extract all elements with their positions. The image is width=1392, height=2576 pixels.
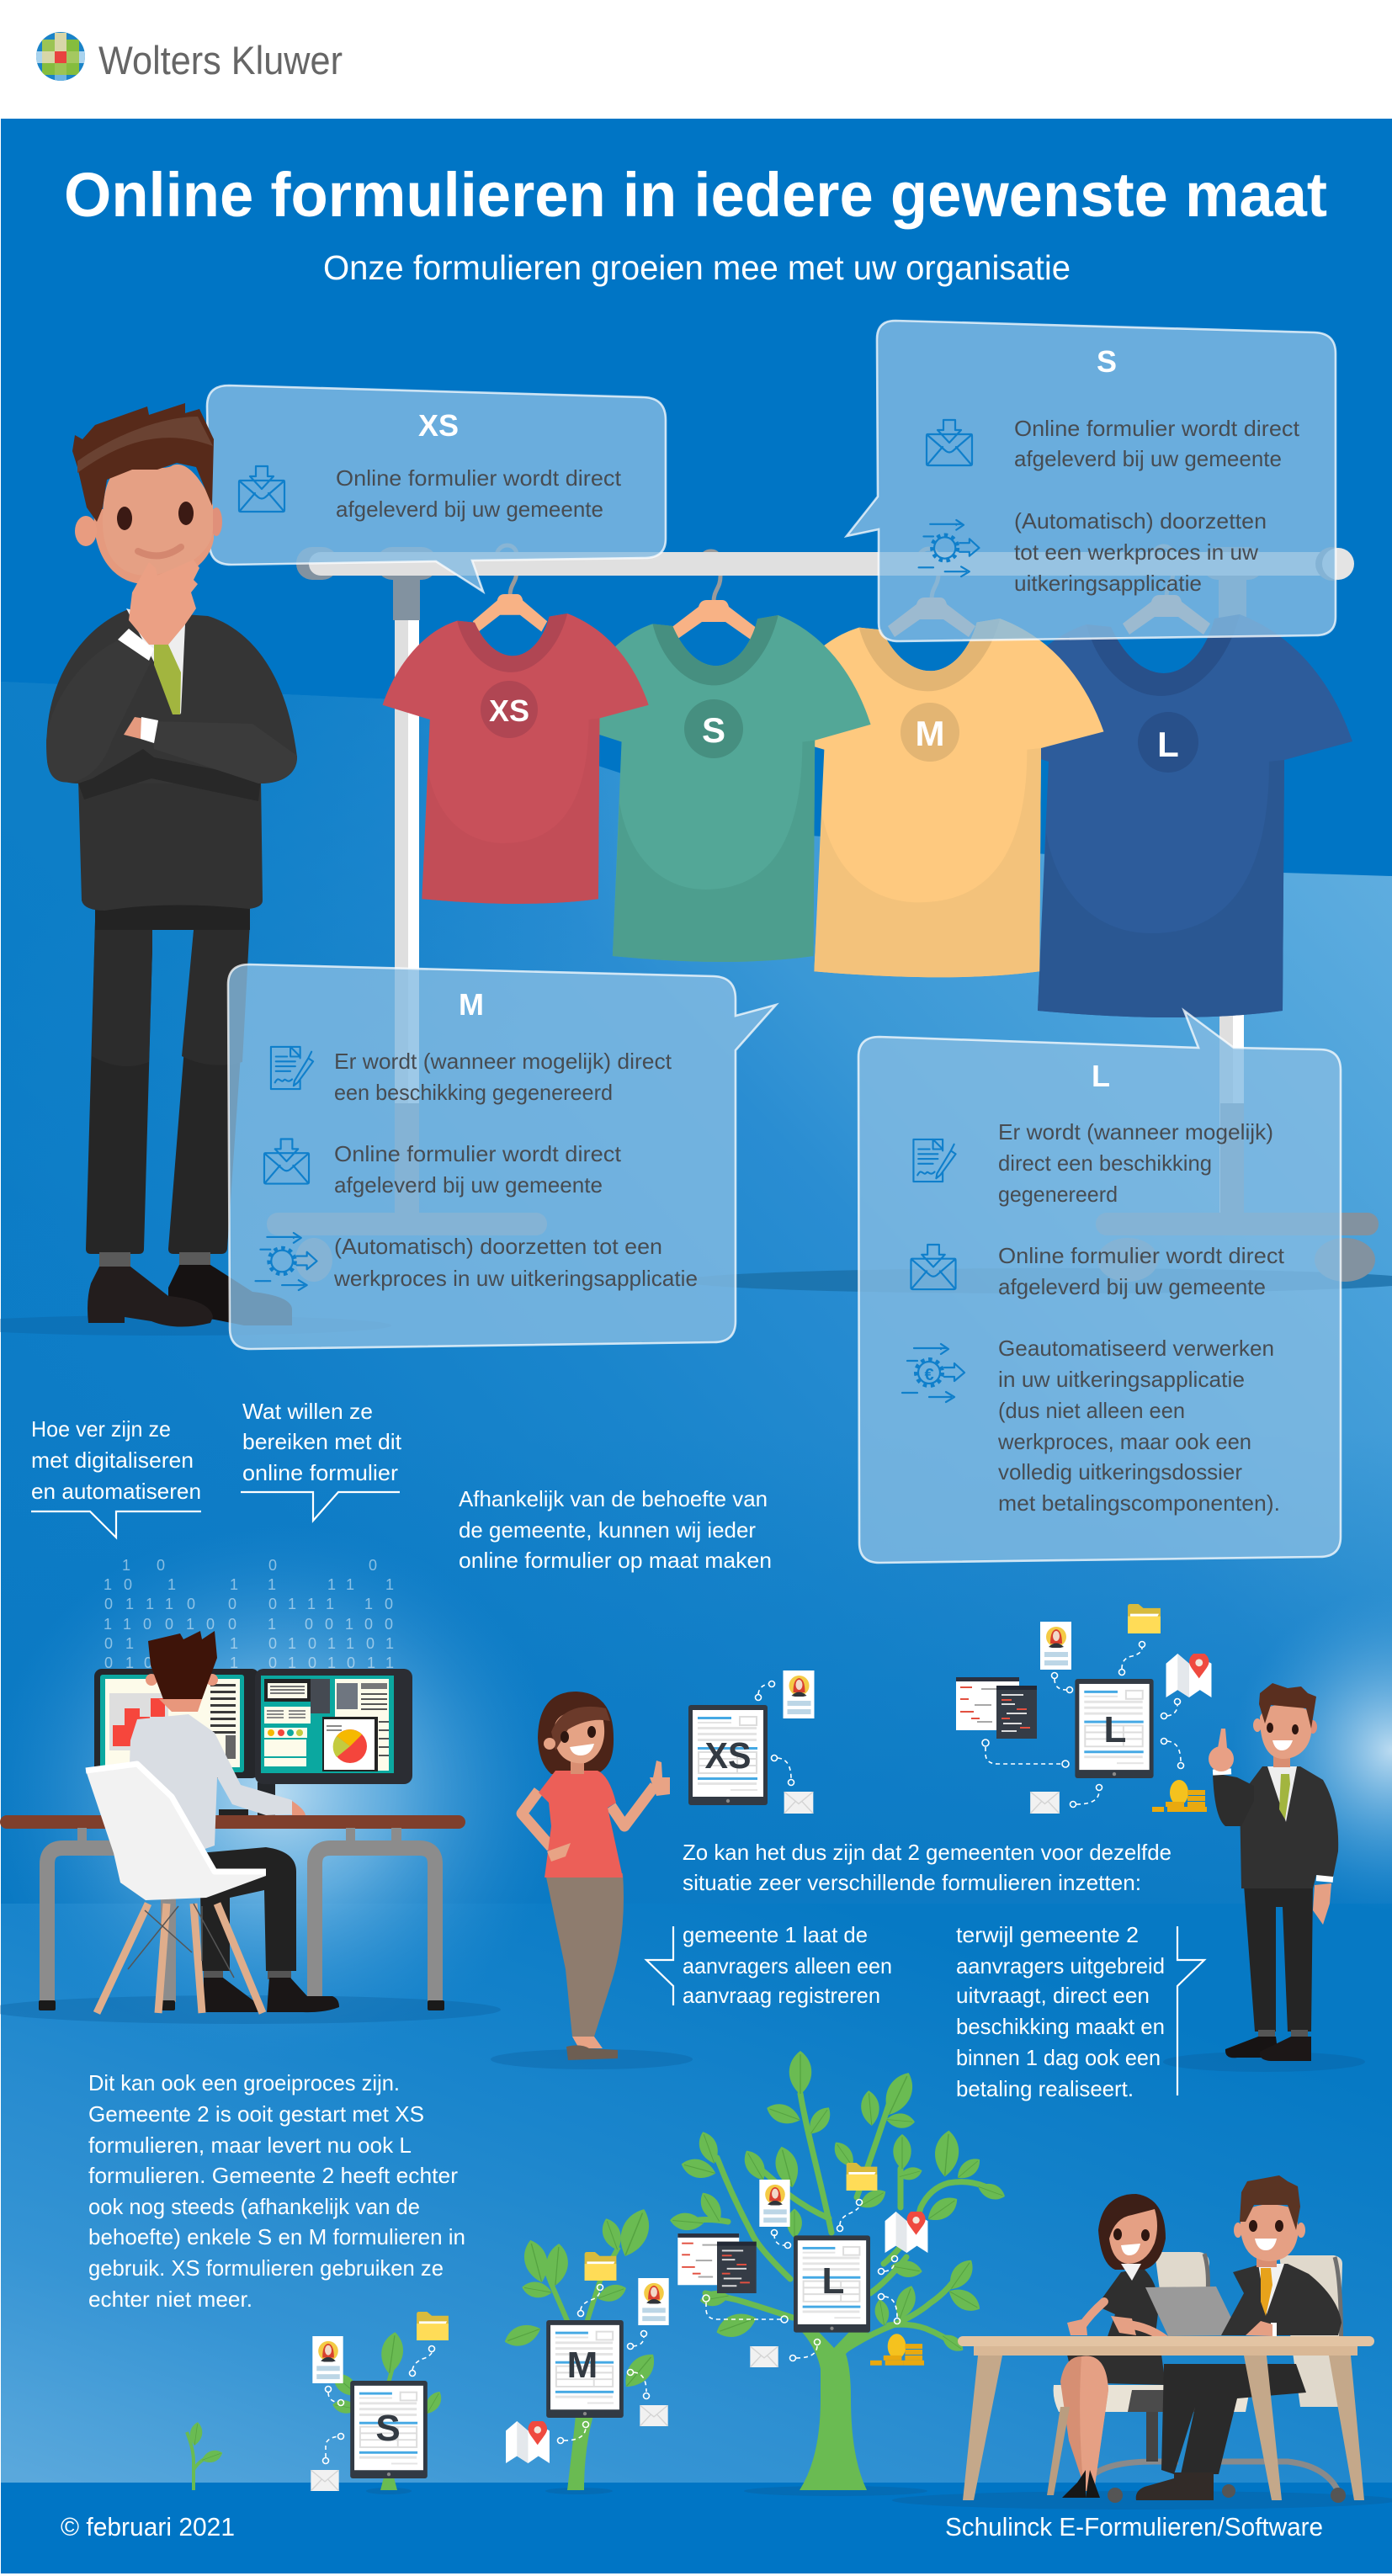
callout: digitalisation question	[31, 1416, 201, 1538]
icon: signed document	[913, 1139, 956, 1182]
text: M workflow	[333, 1234, 698, 1291]
text: two municipalities intro: Zo kan het dus zijn dat 2 gemeenten voor dezelfde	[683, 1840, 1172, 1865]
footer band	[61, 2486, 1392, 2541]
form diagram: L tablet	[956, 1604, 1211, 1814]
panel: M	[228, 964, 776, 1349]
binary digits: 1100100100100	[104, 1616, 393, 1633]
callout: municipality 2: terwijl gemeente 2	[956, 1922, 1139, 1947]
t-shirt L	[983, 595, 1352, 1017]
callout: digitalisation question: Hoe ver zijn ze	[31, 1416, 171, 1442]
text: growth process: formulieren, maar levert nu ook L	[88, 2133, 412, 2158]
binary digits: 1000	[122, 1557, 377, 1574]
text: L automation: in uw uitkeringsapplicatie	[998, 1367, 1245, 1392]
text: L automation: met betalingscomponenten).	[998, 1490, 1280, 1516]
heading XS: XS	[418, 408, 459, 443]
t-shirt L: L	[1157, 725, 1179, 764]
text: L decision: gegenereerd	[998, 1182, 1118, 1207]
title: Online formulieren in iedere gewenste maat	[64, 160, 1327, 230]
t-shirt S: S	[702, 710, 725, 750]
header: Wolters Kluwer logo: Wolters Kluwer	[98, 38, 343, 82]
heading S: S	[1097, 344, 1117, 379]
callout: goal question: bereiken met dit	[242, 1429, 402, 1454]
text: S delivery: afgeleverd bij uw gemeente	[1014, 446, 1282, 471]
clothing rack	[267, 547, 1392, 1293]
text: M delivery: afgeleverd bij uw gemeente	[334, 1172, 603, 1198]
text: L decision	[998, 1119, 1273, 1207]
small sprout	[187, 2421, 224, 2490]
callout: digitalisation question: en automatiseren	[31, 1479, 201, 1504]
icon: gear with arrows	[256, 1233, 316, 1290]
text: M decision: een beschikking gegenereerd	[334, 1080, 613, 1105]
text: L automation	[997, 1336, 1280, 1516]
footer band: © februari 2021	[61, 2512, 235, 2541]
callout: goal question	[241, 1399, 402, 1521]
text: XS delivery: afgeleverd bij uw gemeente	[336, 497, 603, 522]
text: L delivery: Online formulier wordt direct	[998, 1243, 1285, 1268]
growth stage: M tablet tree	[502, 2204, 669, 2490]
icon: envelope	[911, 1245, 956, 1289]
text: depending on need: Afhankelijk van de behoefte van	[459, 1486, 768, 1511]
text: S workflow	[1014, 508, 1267, 596]
text: growth process: Dit kan ook een groeiproces zijn.	[88, 2070, 400, 2095]
heading L: L	[1092, 1059, 1110, 1093]
text: M decision	[334, 1049, 672, 1105]
t-shirt XS	[383, 594, 649, 904]
icon: envelope	[264, 1139, 309, 1184]
panel: S	[847, 321, 1336, 641]
text: L decision: Er wordt (wanneer mogelijk)	[998, 1119, 1273, 1145]
panel: L	[858, 1011, 1341, 1563]
icon: envelope	[927, 420, 972, 465]
growth stage: L tablet tree: L	[822, 2260, 844, 2302]
binary digits: 10111111	[104, 1576, 394, 1593]
form diagram: L tablet: L	[1104, 1709, 1126, 1750]
text: L decision: direct een beschikking	[998, 1150, 1212, 1176]
callout: municipality 1: aanvragers alleen een	[683, 1953, 892, 1978]
character: thinking man, body	[0, 608, 391, 1336]
footer band: Schulinck E-Formulieren/Software	[945, 2512, 1323, 2541]
header: Wolters Kluwer logo	[36, 32, 343, 82]
text: XS delivery	[336, 465, 622, 522]
text: XS delivery: Online formulier wordt direct	[336, 465, 622, 491]
text: L automation: (dus niet alleen een	[998, 1398, 1185, 1423]
text: growth process: behoefte) enkele S en M formulieren in	[88, 2224, 465, 2249]
icon: signed document	[271, 1047, 313, 1089]
growth stage: M tablet tree: M	[567, 2345, 598, 2386]
t-shirt XS: XS	[489, 693, 529, 728]
hanger hooks	[497, 545, 1173, 602]
character: woman with thumb up	[491, 1692, 693, 2069]
binary digits: 0110101101	[104, 1635, 394, 1652]
form diagram: XS tablet	[688, 1670, 815, 1814]
growth stage: L tablet tree	[669, 2051, 1007, 2490]
icon: euro gear with arrows	[902, 1344, 964, 1402]
callout: municipality 2: binnen 1 dag ook een	[956, 2045, 1161, 2070]
text: S workflow: uitkeringsapplicatie	[1014, 571, 1202, 596]
text: growth process: ook nog steeds (afhankelijk van de	[88, 2194, 420, 2219]
binary digits	[104, 1557, 394, 1671]
callout: municipality 1	[646, 1922, 892, 2008]
text: M decision: Er wordt (wanneer mogelijk) direct	[334, 1049, 672, 1074]
panel: XS	[207, 385, 666, 592]
text: L automation: werkproces, maar ook een	[997, 1429, 1251, 1454]
callout: municipality 1: gemeente 1 laat de	[683, 1922, 868, 1947]
text: L automation: Geautomatiseerd verwerken	[998, 1336, 1274, 1361]
text: growth process: gebruik. XS formulieren gebruiken ze	[88, 2255, 444, 2281]
text: M workflow: (Automatisch) doorzetten tot een	[334, 1234, 662, 1259]
text: S delivery: Online formulier wordt direct	[1014, 416, 1300, 441]
callout: municipality 2: betaling realiseert.	[956, 2076, 1134, 2101]
growth stage: S tablet plant: S	[375, 2408, 401, 2449]
text: S workflow: tot een werkproces in uw	[1014, 539, 1258, 565]
character: man pointing up	[1163, 1683, 1365, 2072]
t-shirt M: M	[916, 714, 944, 753]
text: L automation: volledig uitkeringsdossier	[998, 1459, 1242, 1485]
callout: goal question: online formulier	[242, 1460, 398, 1485]
text: growth process: Gemeente 2 is ooit gestart met XS	[88, 2101, 424, 2127]
callout: digitalisation question: met digitaliseren	[31, 1447, 194, 1473]
text: L delivery	[998, 1243, 1285, 1299]
callout: municipality 2: aanvragers uitgebreid	[956, 1953, 1165, 1978]
character: thinking man, head and hand	[72, 403, 222, 661]
text: two municipalities intro	[683, 1840, 1172, 1895]
text: growth process: formulieren. Gemeente 2 heeft echter	[88, 2163, 458, 2188]
text: M delivery	[334, 1141, 622, 1198]
callout: municipality 2	[956, 1922, 1204, 2101]
callout: municipality 2: beschikking maakt en	[956, 2014, 1165, 2039]
text: M delivery: Online formulier wordt direct	[334, 1141, 622, 1166]
callout: goal question: Wat willen ze	[242, 1399, 373, 1424]
icon: euro gear with arrows: €	[924, 1366, 934, 1384]
text: L delivery: afgeleverd bij uw gemeente	[998, 1274, 1266, 1299]
text: M workflow: werkproces in uw uitkeringsapplicatie	[333, 1266, 698, 1291]
text: growth process	[88, 2070, 465, 2312]
text: two municipalities intro: situatie zeer verschillende formulieren inzetten:	[683, 1870, 1141, 1895]
text: S workflow: (Automatisch) doorzetten	[1014, 508, 1267, 534]
t-shirt S	[568, 600, 871, 962]
form diagram: XS tablet: XS	[705, 1735, 751, 1777]
icon: gear with arrows	[919, 520, 980, 576]
scene: two colleagues at a table	[958, 2175, 1374, 2503]
binary digits: 011100011110	[104, 1596, 393, 1612]
text: growth process: echter niet meer.	[88, 2287, 252, 2312]
subtitle: Onze formulieren groeien mee met uw organisatie	[323, 248, 1071, 287]
scene: person at desk with monitors	[0, 1631, 501, 2024]
binary digits: 01010101011	[104, 1654, 394, 1671]
icon: envelope	[239, 466, 284, 512]
text: depending on need: online formulier op maat maken	[459, 1548, 772, 1573]
text: depending on need: de gemeente, kunnen wij ieder	[459, 1517, 756, 1543]
callout: municipality 2: uitvraagt, direct een	[956, 1983, 1150, 2008]
text: S delivery	[1014, 416, 1300, 471]
callout: municipality 1: aanvraag registreren	[683, 1983, 880, 2008]
text: depending on need	[459, 1486, 772, 1573]
heading M: M	[459, 987, 484, 1022]
t-shirt M	[764, 598, 1103, 977]
growth stage: S tablet plant	[311, 2312, 449, 2491]
